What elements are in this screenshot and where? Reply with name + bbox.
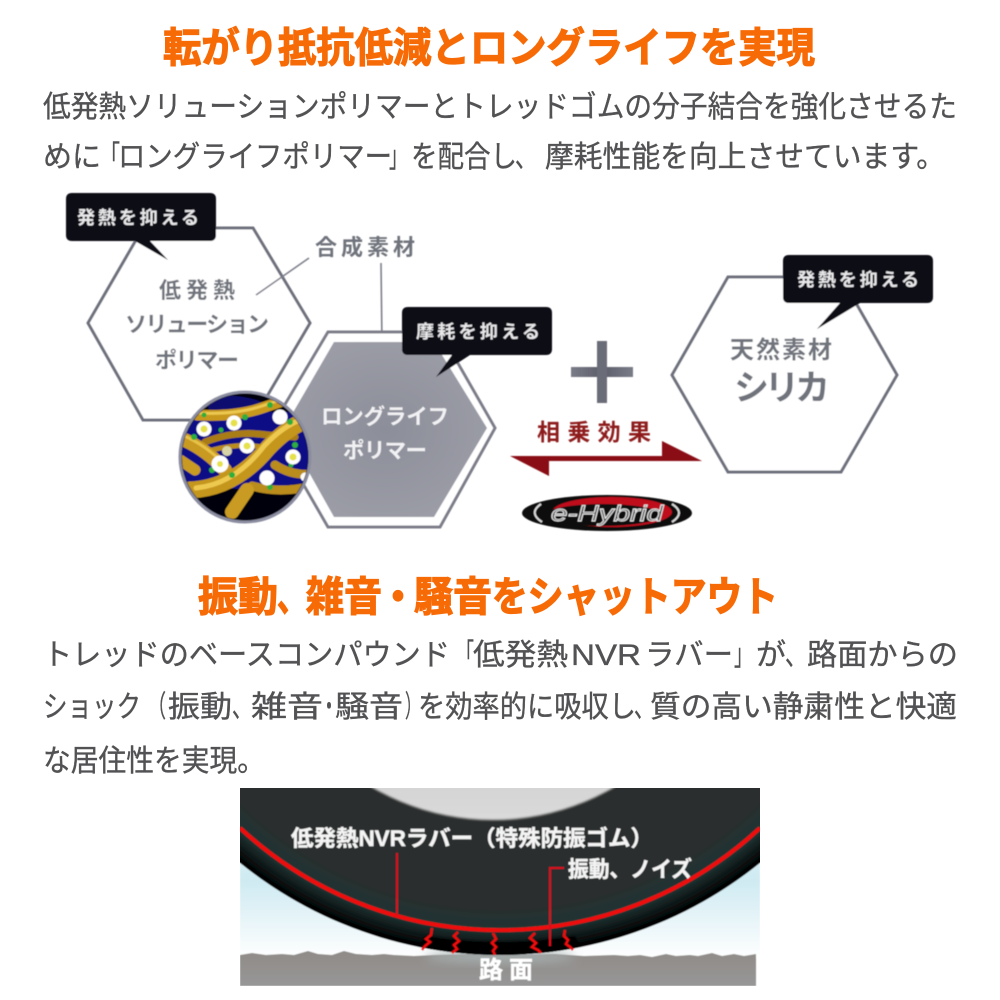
title: shut out vibration and noise: 振動: [198, 574, 278, 620]
panel: long life polymer hexagon: ポリマー: [343, 439, 427, 463]
text block: NVR rubber description: 振動: [168, 691, 232, 724]
road surface: [240, 951, 756, 986]
text block: NVR rubber description: 「: [456, 639, 474, 672]
text block: NVR rubber description: 、: [634, 691, 654, 724]
icon: plus sign: [571, 341, 633, 403]
text block: long life polymer description: 」: [389, 141, 407, 174]
text block: NVR rubber description: が: [756, 639, 786, 672]
text block: NVR rubber description: [43, 639, 958, 778]
text block: long life polymer description: ロングライフポリマー: [118, 141, 392, 174]
text block: NVR rubber description: 質の高い静粛性と快適: [650, 691, 957, 724]
text block: NVR rubber description: 低発熱: [473, 639, 568, 672]
callout: suppress heat, right: [783, 255, 933, 329]
panel: natural material silica hexagon: 天然素材: [730, 337, 832, 364]
panel: low heat solution polymer hexagon: 低発熱: [159, 278, 235, 303]
callout: suppress wear: 摩耗を抑える: [416, 321, 540, 342]
title: shut out vibration and noise: 雑音: [306, 574, 382, 620]
text block: NVR rubber description: （: [148, 691, 166, 724]
chart: tire cross section on road: [240, 788, 760, 986]
text block: NVR rubber description: NVR: [571, 639, 641, 672]
text block: NVR rubber description: な居住性を実現。: [43, 745, 265, 778]
panel: low heat solution polymer hexagon: ソリューション: [125, 312, 269, 337]
panel: natural material silica hexagon: [672, 277, 897, 472]
arrow: synergy double arrow: [510, 441, 702, 476]
icon: e-Hybrid logo: [522, 495, 692, 531]
vibration squiggles: [422, 928, 573, 955]
text block: NVR rubber description: を効率的に吸収し: [418, 691, 636, 724]
text block: long life polymer description: 摩耗性能を向上させています。: [545, 141, 945, 174]
text block: long life polymer description: 、: [515, 141, 537, 174]
leader lines: [396, 853, 398, 915]
red NVR rubber curve: [240, 828, 760, 930]
panel: natural material silica hexagon: シリカ: [734, 369, 830, 408]
callout: suppress heat, left: 発熱を抑える: [77, 207, 199, 228]
title: shut out vibration and noise: 、: [277, 574, 307, 620]
text block: long life polymer description: 「: [100, 141, 120, 174]
text block: NVR rubber description: 雑音: [251, 691, 323, 724]
text block: NVR rubber description: ）: [405, 691, 421, 724]
panel: low heat solution polymer hexagon: [88, 228, 310, 420]
text block: NVR rubber description: 」: [734, 639, 752, 672]
label: synergy effect: 相乗効果: [537, 419, 651, 445]
tire: [240, 788, 760, 955]
text block: long life polymer description: めに: [43, 141, 101, 174]
icon: molecule structure circle: [180, 392, 312, 522]
text block: NVR rubber description: ラバー: [645, 639, 733, 672]
title: rolling resistance and long life: 転がり抵抗低減とロングライフを実現: [163, 25, 815, 71]
text block: NVR rubber description: ショック: [43, 691, 141, 724]
panel: long life polymer hexagon: ロングライフ: [321, 404, 449, 429]
text block: long life polymer description: [43, 91, 957, 174]
text block: NVR rubber description: 路面からの: [807, 639, 958, 672]
wheel: [370, 788, 616, 822]
callout: suppress heat, left: [66, 193, 216, 260]
rubber label: 低発熱NVRラバー（特殊防振ゴム）: [291, 826, 653, 851]
text block: NVR rubber description: トレッドのベースコンパウンド: [43, 639, 450, 672]
dark contact patch: [420, 935, 580, 955]
icon: e-Hybrid logo: e-Hybrid: [551, 501, 664, 526]
title: shut out vibration and noise: ・: [379, 574, 417, 620]
text block: NVR rubber description: 騒音: [335, 691, 403, 724]
road label: 路面: [479, 957, 533, 984]
panel: low heat solution polymer hexagon: ポリマー: [155, 348, 239, 373]
text block: NVR rubber description: 、: [232, 691, 252, 724]
title: shut out vibration and noise: [198, 574, 778, 620]
title: shut out vibration and noise: をシャットアウト: [492, 574, 778, 620]
callout: suppress wear: [402, 307, 552, 377]
text block: NVR rubber description: 、: [785, 639, 807, 672]
text block: long life polymer description: を配合し: [411, 141, 517, 174]
label: synthetic material with leader lines: [256, 235, 415, 345]
sky background: [240, 862, 760, 958]
vibration and noise label: 振動、ノイズ: [568, 857, 692, 882]
label: synthetic material with leader lines: 合成素材: [315, 235, 415, 260]
title: shut out vibration and noise: 騒音: [414, 574, 492, 620]
text block: NVR rubber description: ・: [320, 691, 338, 724]
panel: long life polymer hexagon: [271, 332, 495, 527]
diagram: polymer and silica synergy: [66, 193, 933, 531]
callout: suppress heat, right: 発熱を抑える: [797, 269, 919, 290]
